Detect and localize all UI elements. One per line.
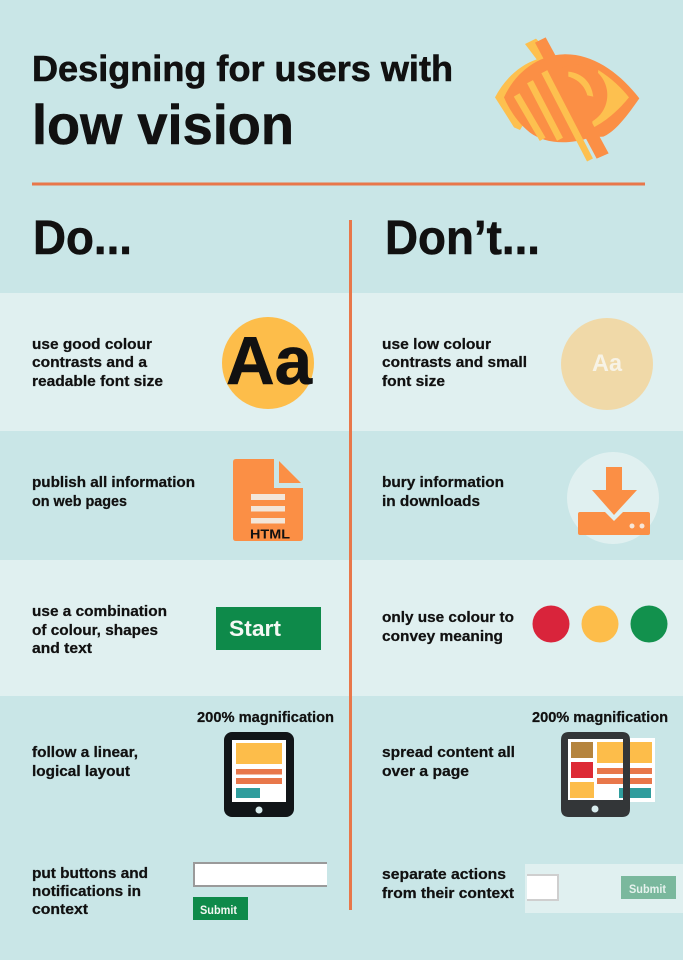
submit button (193, 897, 248, 920)
don't text: low contrast: font size (382, 373, 445, 390)
input field (193, 862, 327, 887)
title: low vision (32, 93, 294, 156)
don't text: colour only: only use colour to (382, 609, 514, 626)
heading: Do: Do... (33, 212, 132, 265)
do text: colour shapes text: of colour, shapes (32, 622, 158, 639)
icon: HTML document: HTML (250, 526, 290, 542)
do text: web pages: publish all information (32, 474, 195, 491)
faded submit button (621, 876, 676, 899)
row 3: conveying meaning (0, 560, 683, 696)
don't text: separate actions: separate actions (382, 866, 506, 883)
coloured circles (532, 606, 668, 642)
don't text: separate actions: from their context (382, 885, 514, 902)
start button (216, 607, 321, 650)
icon: HTML document (233, 459, 303, 542)
column divider (349, 220, 352, 910)
icon: low contrast Aa (561, 318, 653, 410)
do text: colour shapes text: use a combination (32, 603, 167, 620)
icon: tablet with linear layout (224, 732, 294, 817)
row 2: information format (32, 452, 659, 544)
do text: buttons in context: context (32, 901, 88, 918)
don't text: colour only (382, 609, 514, 645)
do text: buttons in context: notifications in (32, 883, 141, 900)
row 5: buttons in context (32, 862, 683, 920)
start button: Start (229, 616, 282, 641)
title: Designing for users with (32, 48, 453, 89)
do text: colour shapes text (32, 603, 167, 657)
do text: linear layout: follow a linear, (32, 744, 138, 761)
title (32, 48, 453, 156)
do text: colour shapes text: and text (32, 640, 92, 657)
do text: buttons in context: put buttons and (32, 865, 148, 882)
do text: linear layout (32, 744, 138, 780)
do text: web pages: on web pages (32, 493, 127, 510)
don't text: downloads: in downloads (382, 493, 480, 510)
icon: tablet with scattered layout (561, 732, 655, 817)
submit button: Submit (200, 905, 237, 917)
do text: colour contrast: readable font size (32, 373, 163, 390)
icon: download (567, 452, 659, 544)
faded input field (527, 875, 558, 900)
do text: colour contrast (32, 336, 163, 390)
don't text: low contrast: contrasts and small (382, 354, 527, 371)
do text: colour contrast: use good colour (32, 336, 152, 353)
don't text: downloads: bury information (382, 474, 504, 491)
don't text: low contrast (382, 336, 527, 390)
don't text: spread content (382, 744, 515, 780)
do text: linear layout: logical layout (32, 763, 130, 780)
don't text: low contrast: use low colour (382, 336, 491, 353)
row 1: colour contrast (0, 293, 683, 431)
label: 200% magnification: 200% magnification (197, 709, 334, 726)
don't text: spread content: over a page (382, 763, 469, 780)
icon: high contrast Aa: Aa (226, 323, 313, 399)
row 4: layout (32, 709, 668, 817)
label: 200% magnification: 200% magnification (532, 709, 668, 726)
icon: low contrast Aa: Aa (592, 350, 623, 377)
header divider (32, 182, 645, 186)
heading: Don't: Don’t... (385, 212, 540, 265)
faded submit button: Submit (629, 884, 666, 896)
don't text: colour only: convey meaning (382, 628, 503, 645)
separated form panel (525, 864, 683, 913)
don't text: downloads (382, 474, 504, 510)
do text: colour contrast: contrasts and a (32, 354, 148, 371)
do text: buttons in context (32, 865, 148, 918)
do text: web pages (32, 474, 195, 510)
don't text: spread content: spread content all (382, 744, 515, 761)
icon: crossed-out eye (495, 37, 639, 160)
don't text: separate actions (382, 866, 514, 902)
